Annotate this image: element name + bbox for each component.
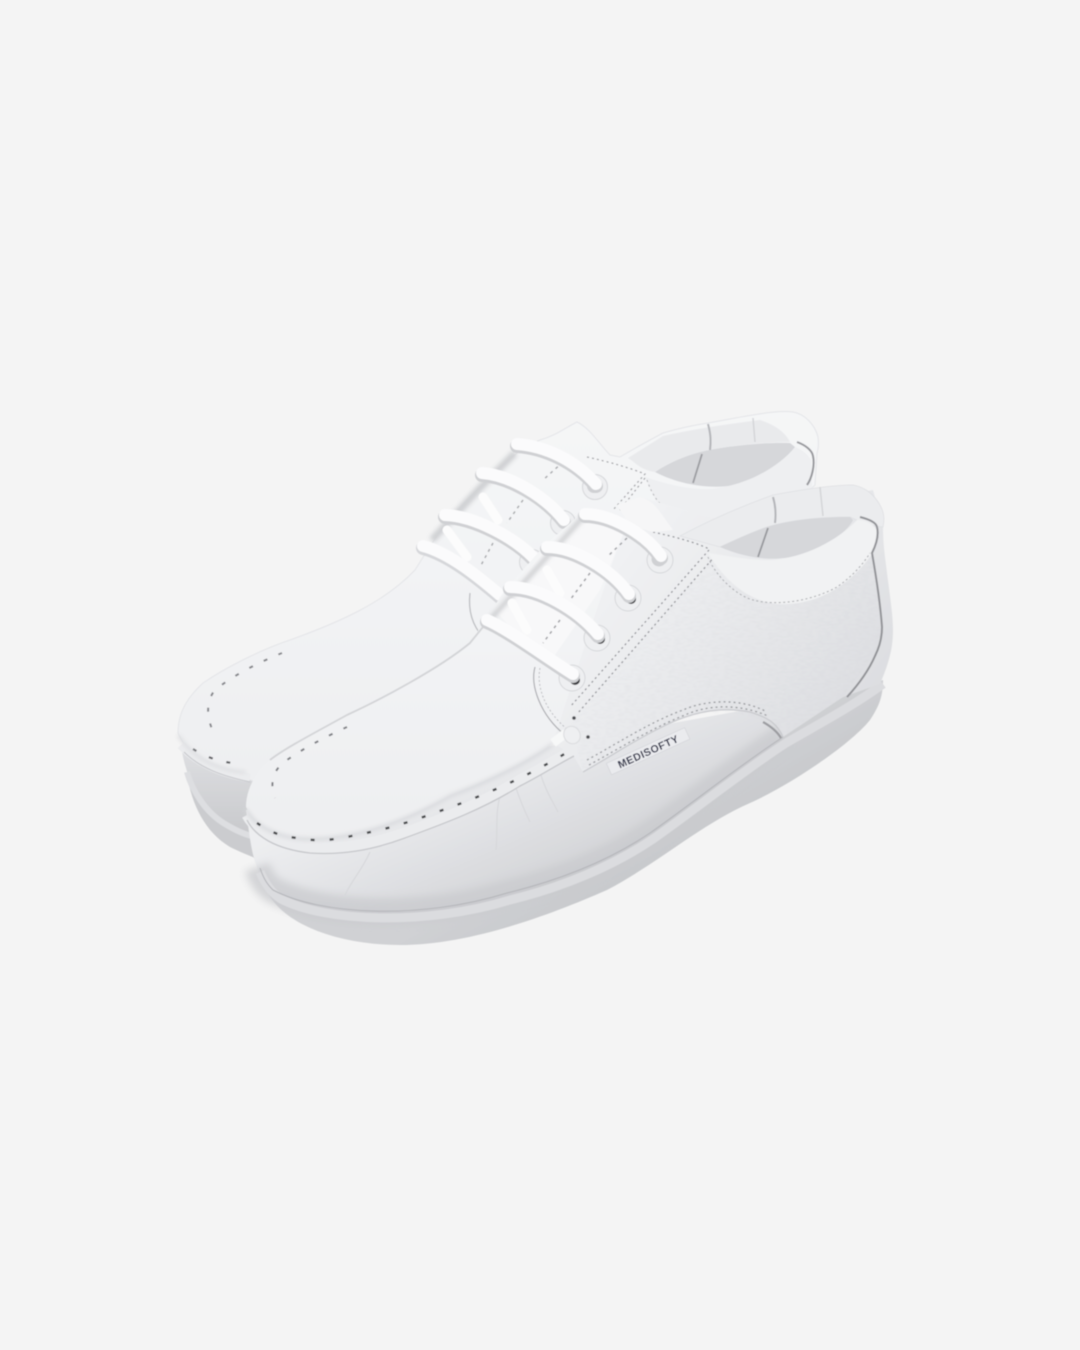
product illustration: pair of white shoes [178, 411, 893, 946]
front shoe insole [720, 517, 853, 559]
front shoe leather grain [560, 540, 900, 780]
back shoe apron rope [181, 745, 250, 778]
front shoe heel seam [847, 517, 882, 697]
back shoe sole [187, 745, 300, 859]
front shoe side wall [246, 700, 800, 911]
front shoe laces [487, 514, 661, 676]
back shoe side wall [181, 745, 262, 834]
back shoe toe stitching [208, 653, 282, 733]
back shoe padded roll [645, 447, 812, 560]
seam between shoes [270, 622, 487, 760]
back shoe heel and rear quarter [560, 440, 815, 600]
front shoe collar band [680, 485, 884, 547]
front shoe vertical stitching [570, 550, 715, 714]
back shoe upper [178, 412, 818, 800]
front shoe brand label: MEDISOFTY [616, 733, 681, 771]
back shoe laces [423, 444, 596, 597]
front shoe toe stitching [272, 727, 347, 798]
front shoe top stitching [653, 532, 709, 549]
front shoe wall lower shade [257, 737, 783, 911]
front shoe sole [255, 680, 883, 945]
back shoe eyelets [520, 474, 608, 574]
front shoe saddle edge [583, 710, 783, 772]
front shoe toe plate edge [246, 744, 553, 839]
back shoe toe ridge shade [178, 735, 246, 772]
front shoe rope stitches [257, 753, 566, 840]
front shoe tongue [495, 515, 625, 655]
front (right) shoe [246, 485, 900, 945]
front shoe brand label [606, 728, 690, 775]
front shoe lace shadow [484, 515, 585, 626]
back (left) shoe [178, 412, 818, 859]
back shoe collar padding [655, 443, 795, 487]
front shoe wall creases [345, 772, 558, 895]
front shoe toe plate and vamp [246, 510, 620, 838]
front shoe eyelets [559, 547, 673, 691]
front shoe saddle stitching [587, 702, 768, 765]
front shoe tongue tab [617, 497, 673, 532]
front shoe eyestay seam [534, 667, 565, 735]
front shoe padded roll [708, 520, 877, 604]
front shoe sole lip [260, 684, 883, 918]
back shoe eyestay seam [470, 593, 483, 637]
front shoe apron rope [247, 750, 574, 848]
back shoe tongue stitching [480, 462, 563, 567]
front shoe tongue stitching [543, 538, 627, 643]
back shoe lace shadow [432, 453, 515, 540]
front shoe knot tab [553, 716, 590, 747]
back shoe saddle stitching [587, 457, 645, 510]
front shoe heel and quarter [535, 490, 893, 772]
